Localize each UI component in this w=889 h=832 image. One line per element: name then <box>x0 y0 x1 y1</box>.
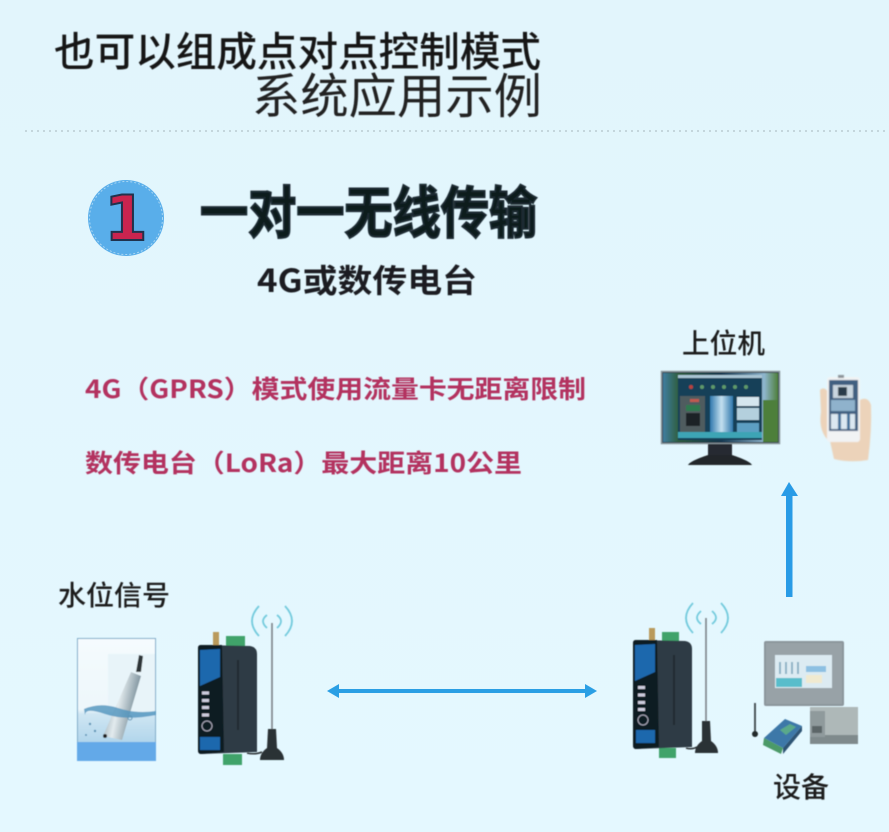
icon: touch panel <box>764 641 844 706</box>
section heading: 一对一无线传输 <box>200 182 537 245</box>
icon: left antenna with signal <box>247 606 292 760</box>
icon: right antenna with signal <box>686 603 728 753</box>
icon: left wireless transmitter <box>198 632 257 765</box>
number badge: 1 <box>104 182 148 255</box>
image: water level sensor <box>77 638 156 761</box>
icon: data terminal <box>752 703 802 754</box>
icon: right wireless transmitter <box>633 628 692 758</box>
label: device: 设备 <box>773 772 829 803</box>
arrow: up <box>781 482 798 597</box>
icon: phone in hand <box>820 375 871 461</box>
icon: monitor <box>662 372 780 465</box>
feature text: 4G: 4G（GPRS）模式使用流量卡无距离限制 <box>85 370 586 406</box>
title <box>54 29 542 124</box>
label: host computer: 上位机 <box>682 328 766 359</box>
icon: PLC module <box>810 707 858 744</box>
label: water level signal: 水位信号 <box>58 580 170 611</box>
feature text: LoRa: 数传电台（LoRa）最大距离10公里 <box>85 444 522 480</box>
number badge <box>88 180 164 256</box>
subheading: 4G或数传电台 <box>257 256 477 302</box>
arrow: two-way wireless link <box>327 684 597 698</box>
title: 系统应用示例 <box>252 71 542 124</box>
title: 也可以组成点对点控制模式 <box>54 29 541 75</box>
